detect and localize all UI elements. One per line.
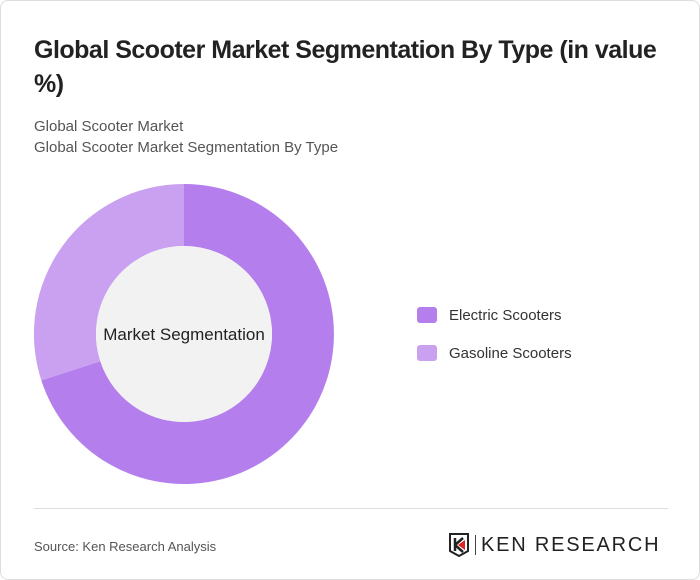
title: Global Scooter Market Segmentation By Type (in value xyxy=(34,36,656,64)
slice: electric xyxy=(41,184,334,484)
subtitle xyxy=(34,118,338,156)
title: %) xyxy=(34,70,64,98)
source: Source: Ken Research Analysis xyxy=(34,539,216,554)
legend: electric: Electric Scooters xyxy=(449,307,562,324)
subtitle: Global Scooter Market Segmentation By Type xyxy=(34,139,338,156)
slice: gasoline xyxy=(34,184,184,380)
legend: gasoline: Gasoline Scooters xyxy=(449,345,572,362)
logo: KEN RESEARCH xyxy=(481,534,660,556)
center label xyxy=(96,246,272,422)
subtitle: Global Scooter Market xyxy=(34,118,183,135)
center label: Market Segmentation xyxy=(103,325,265,344)
title xyxy=(34,36,656,98)
